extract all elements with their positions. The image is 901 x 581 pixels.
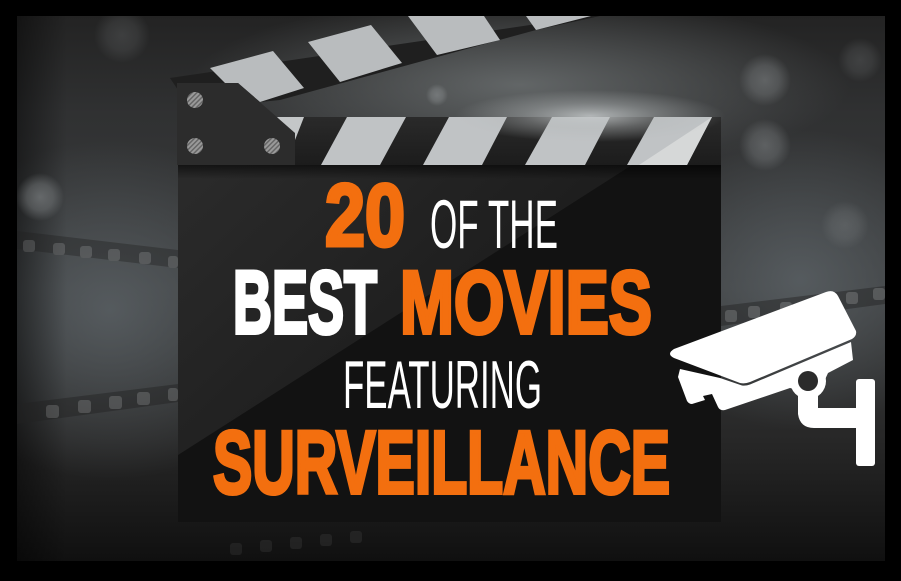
clapper: light glow (455, 90, 725, 142)
camera hood (670, 291, 856, 383)
white stripes (321, 117, 712, 165)
film strip: bottom (230, 531, 362, 555)
bokeh lights (16, 7, 882, 249)
film strip: lower left (17, 384, 178, 424)
title line 1: OF THE (430, 186, 558, 263)
clapper: board body (178, 165, 721, 522)
camera pivot (790, 363, 826, 399)
clapper: small lens flare (426, 84, 448, 106)
title line 4: SURVEILLANCE (213, 412, 670, 512)
camera body (678, 342, 853, 410)
screw (264, 138, 280, 154)
title line 2: MOVIES (400, 252, 652, 352)
clapperboard (170, 16, 725, 522)
clapper: lower stick (277, 117, 721, 165)
title line 2 (233, 252, 652, 352)
white stripes (210, 16, 591, 102)
screw (187, 138, 203, 154)
title line 1: 20 (325, 166, 405, 264)
screw (187, 92, 203, 108)
title line 2: BEST (233, 252, 377, 352)
film strip: upper left (17, 231, 178, 268)
camera mount arm (798, 386, 860, 428)
clapper: hinge block with screws (177, 83, 295, 165)
film strip: right (721, 286, 885, 326)
title line 1 (325, 166, 558, 264)
title line 3: FEATURING (343, 347, 542, 423)
title text (213, 166, 670, 512)
clapper: top stick (170, 16, 600, 102)
icon: security camera (670, 291, 875, 466)
wall plate (856, 379, 875, 466)
